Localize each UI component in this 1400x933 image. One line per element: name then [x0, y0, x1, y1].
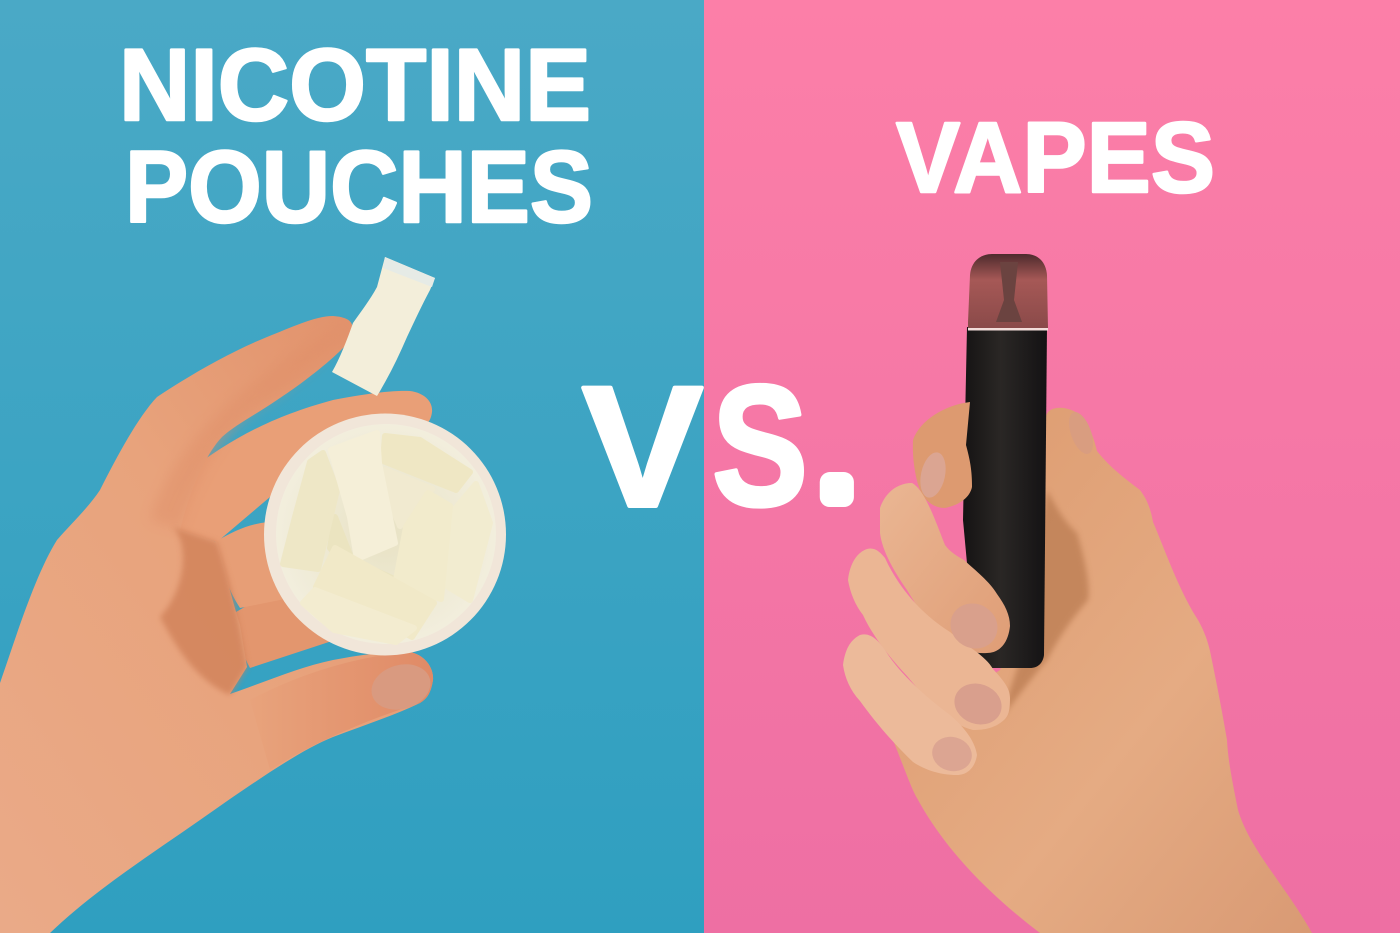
tin inner: [276, 424, 496, 644]
vape collar: [968, 328, 1048, 330]
illustration: vape hand palm and thumb: [893, 408, 1312, 933]
pouches in tin: [283, 433, 490, 642]
fourth finger: [236, 596, 335, 668]
heading: nicotine pouches: POUCHES: [125, 130, 593, 244]
VS. label: V: [582, 351, 703, 543]
illustration: vape device: [963, 254, 1048, 668]
heading: vapes: VAPES: [896, 102, 1215, 214]
VS. label: S: [712, 350, 808, 542]
tin rim: [264, 414, 506, 656]
ring finger nail: [949, 677, 1007, 731]
third finger: [215, 522, 290, 608]
pinky finger: [843, 634, 977, 775]
illustration: hand holding pouch tin: [0, 316, 436, 933]
vape mouthpiece: [968, 254, 1048, 328]
heading: nicotine pouches: NICOTINE: [119, 28, 591, 142]
index finger shading: [150, 325, 352, 528]
illustration: single pouch: [332, 257, 435, 396]
VS. label: .: [823, 407, 851, 519]
index nail: [916, 450, 950, 500]
index finger: [913, 402, 972, 508]
palm inner shadow: [1000, 490, 1089, 720]
pinky nail: [928, 732, 976, 776]
thumb nail: [1064, 409, 1098, 457]
ring finger: [848, 549, 1010, 730]
middle finger: [880, 483, 1010, 653]
mouthpiece inner tube: [996, 262, 1022, 322]
illustration: pouch tin: [264, 414, 506, 656]
palm, index finger and thumb: [0, 316, 433, 933]
thumb tip shading: [250, 652, 433, 770]
panel: pink vapes background: [704, 0, 1400, 933]
illustration: vape hand fingers: [843, 402, 1098, 776]
second finger: [175, 391, 432, 542]
VS. label: [582, 350, 851, 543]
thumb web shading: [160, 527, 247, 695]
thumb nail: [366, 658, 436, 716]
heading: nicotine pouches: [119, 28, 593, 244]
panel: blue nicotine pouches background: [0, 0, 704, 933]
vape body: [963, 327, 1047, 668]
middle finger nail: [942, 595, 1006, 657]
